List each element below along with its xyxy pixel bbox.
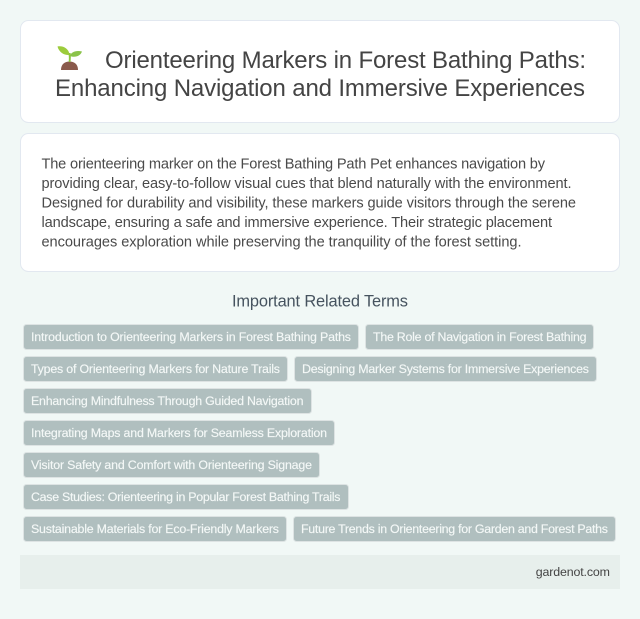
footer bar <box>20 555 620 589</box>
title line 2: Enhancing Navigation and Immersive Experiences <box>55 75 585 102</box>
chip: role of navigation <box>366 324 594 350</box>
chip: sustainable materials <box>24 516 286 542</box>
chip: designing marker systems <box>294 356 596 382</box>
chip: types of markers: Types of Orienteering Markers for Nature Trails <box>31 362 280 376</box>
chip: types of markers <box>24 356 288 382</box>
description paragraph: encourages exploration while preserving the tranquility of the forest setting. <box>42 234 522 250</box>
chip: visitor safety <box>24 452 320 478</box>
chip: introduction <box>24 324 358 350</box>
chip: designing marker systems: Designing Marker Systems for Immersive Experiences <box>302 362 589 376</box>
panel: description card <box>20 134 620 272</box>
panel: related term chips <box>24 324 616 542</box>
description paragraph: The orienteering marker on the Forest Bathing Path Pet enhances navigation by <box>42 156 546 172</box>
chip: visitor safety: Visitor Safety and Comfort with Orienteering Signage <box>31 458 312 472</box>
chip: case studies: Case Studies: Orienteering in Popular Forest Bathing Trails <box>31 490 340 504</box>
title line 1: Orienteering Markers in Forest Bathing Paths: <box>105 47 586 74</box>
panel: title card <box>20 20 620 122</box>
chip: future trends: Future Trends in Orienteering for Garden and Forest Paths <box>301 522 608 536</box>
chip: case studies <box>24 484 348 510</box>
chip: maps and markers <box>24 420 334 446</box>
chip: future trends <box>294 516 616 542</box>
chip: introduction: Introduction to Orienteering Markers in Forest Bathing Paths <box>31 330 351 344</box>
icon: seedling <box>58 46 82 70</box>
description paragraph <box>42 156 576 250</box>
chip: mindfulness: Enhancing Mindfulness Through Guided Navigation <box>31 394 304 408</box>
chip: mindfulness <box>24 388 312 414</box>
heading: related terms: Important Related Terms <box>232 293 408 311</box>
chip: role of navigation: The Role of Navigation in Forest Bathing <box>373 330 587 344</box>
chip: maps and markers: Integrating Maps and Markers for Seamless Exploration <box>31 426 327 440</box>
description paragraph: Designed for durability and visibility, these markers guide visitors through the serene <box>42 195 576 211</box>
footer source text: gardenot.com <box>536 565 610 579</box>
chip: sustainable materials: Sustainable Materials for Eco-Friendly Markers <box>31 522 279 536</box>
description paragraph: providing clear, easy-to-follow visual cues that blend naturally with the environment. <box>42 176 572 192</box>
description paragraph: landscape, ensuring a safe and immersive experience. Their strategic placement <box>42 215 552 231</box>
